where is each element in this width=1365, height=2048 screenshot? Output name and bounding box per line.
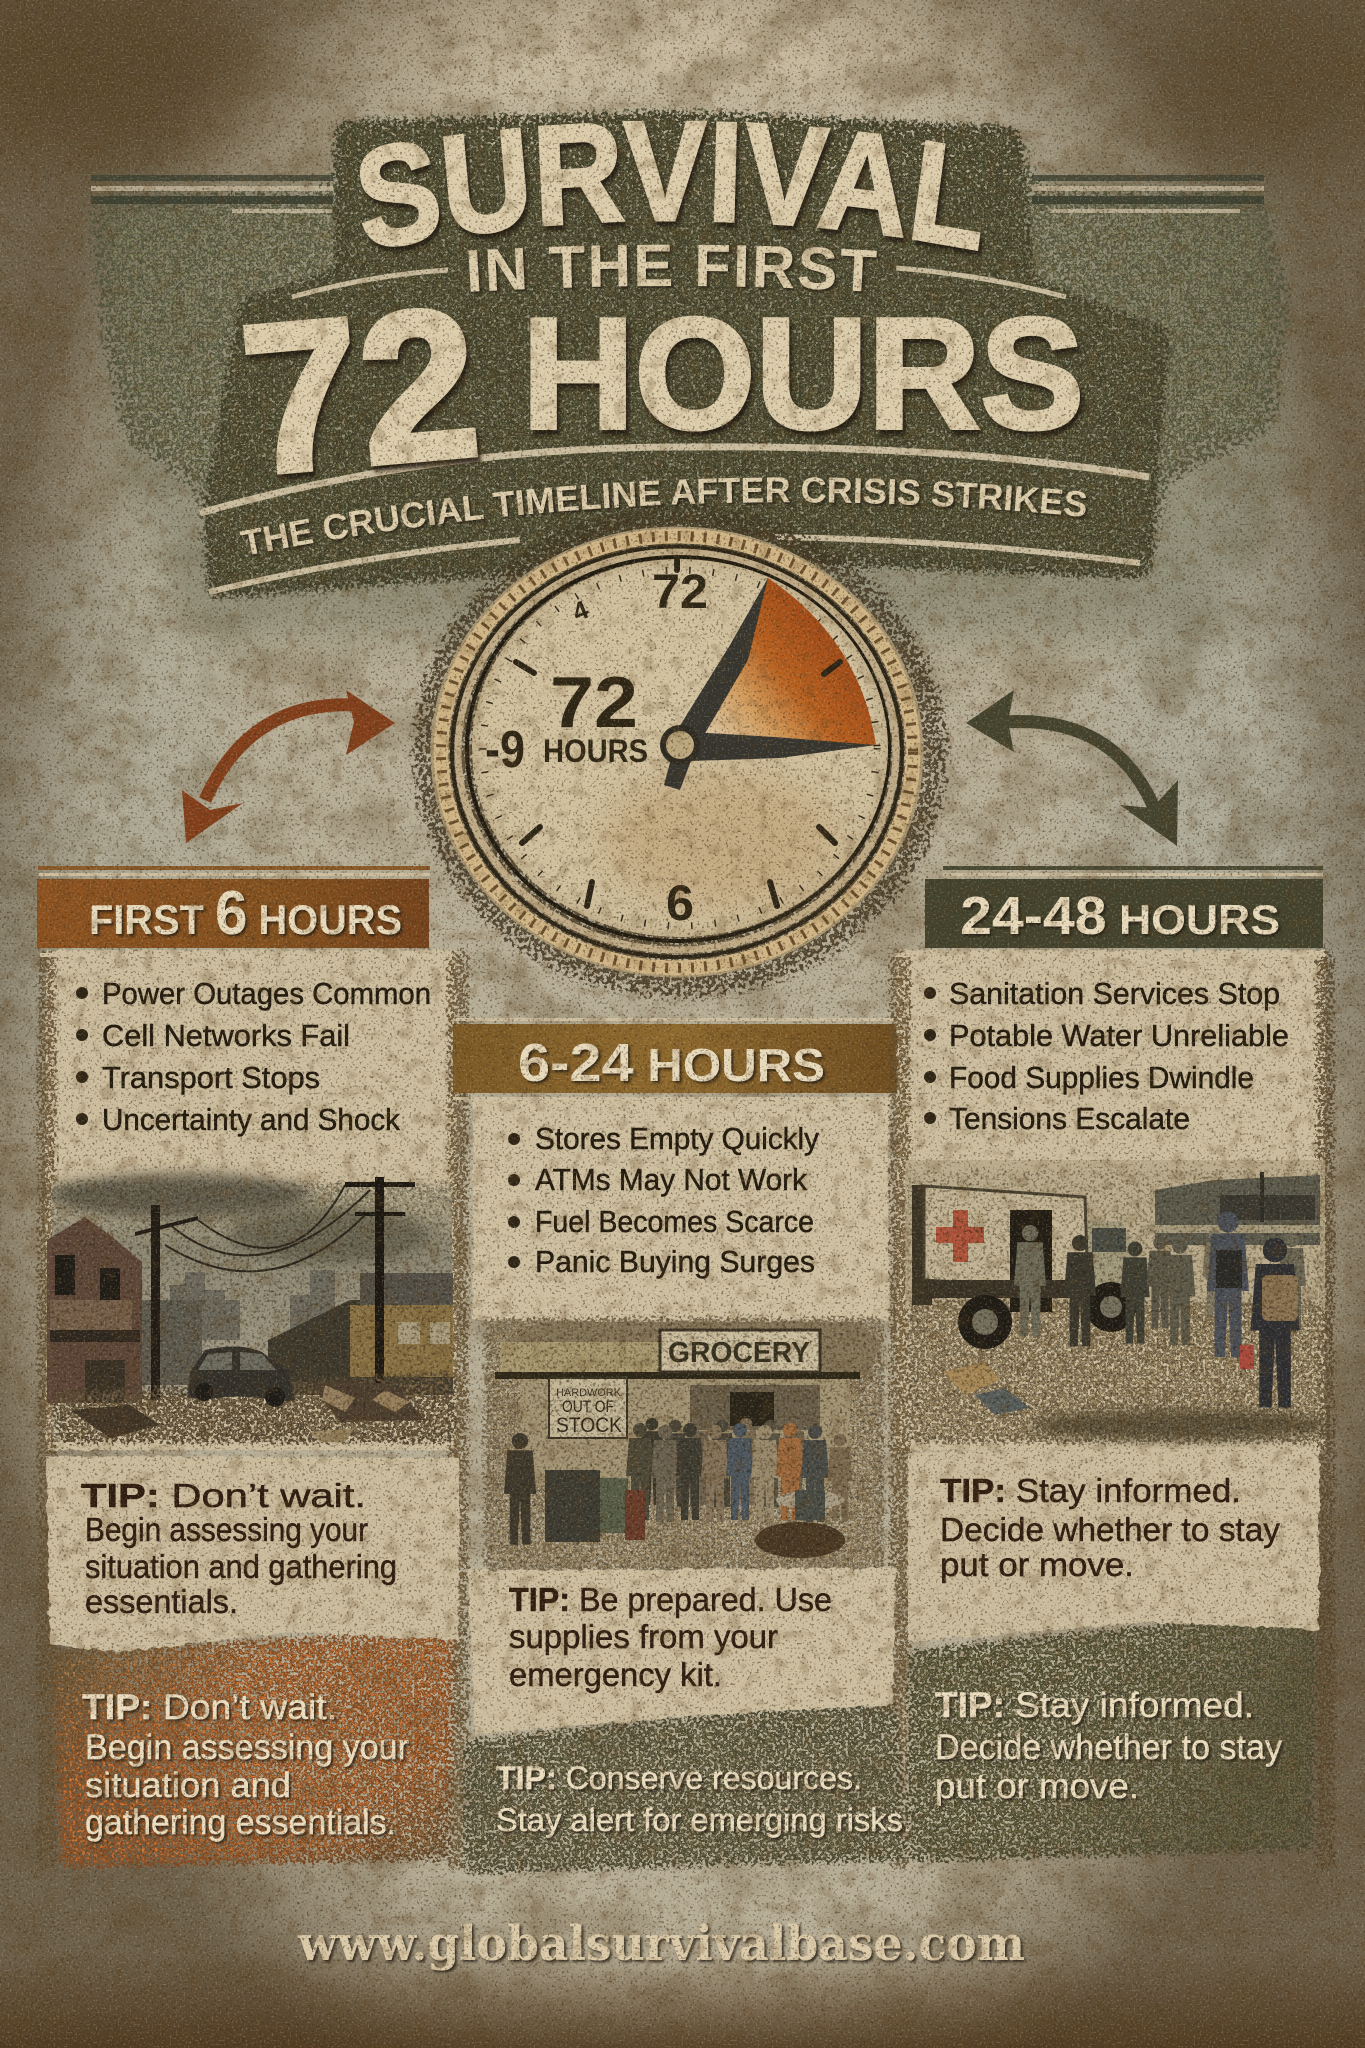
store sign — [660, 1330, 820, 1372]
tip card: stay informed (paper): Decide whether to stay — [940, 1511, 1281, 1548]
left house — [47, 1217, 142, 1403]
tip card: don't wait (paper): Begin assessing your — [85, 1511, 368, 1548]
tip card: be prepared (paper) — [468, 1568, 895, 1734]
tip card: stay informed (paper) — [908, 1448, 1319, 1642]
bullet list: Cell Networks Fail — [102, 1018, 350, 1053]
bullet list — [508, 1121, 819, 1279]
header banner: 24-48 hours: 24-48 HOURS — [960, 886, 1280, 946]
dial numerals: 6 — [666, 875, 694, 931]
bullet list — [924, 976, 1289, 1136]
red cross — [936, 1210, 984, 1262]
tip card: don't wait (paper) — [46, 1456, 460, 1652]
clock: rope-framed 72 hours dial — [414, 508, 946, 996]
tip card: stay informed (paper): put or move. — [940, 1546, 1134, 1583]
dial numerals — [485, 566, 708, 931]
tip card: stay informed (olive): Decide whether to stay — [935, 1728, 1282, 1767]
orange elapsed wedge — [692, 578, 876, 745]
tip card: don't wait (paper): essentials. — [85, 1583, 238, 1620]
header banner: first 6 hours: FIRST 6 HOURS — [89, 879, 402, 948]
tip card: be prepared (paper): emergency kit. — [509, 1656, 722, 1693]
background buildings — [1140, 1172, 1320, 1245]
title: IN THE FIRST: IN THE FIRST — [468, 244, 880, 295]
illustration: blackout street — [47, 1165, 455, 1443]
tip card: don't wait (rust): situation and — [85, 1766, 291, 1805]
panel body paper — [897, 950, 1325, 1450]
dial numerals: HOURS — [543, 733, 648, 769]
queue of people — [626, 1418, 853, 1522]
right buildings — [268, 1273, 453, 1395]
title: SURVIVAL: SURVIVAL — [360, 120, 985, 258]
illustration: aid truck and crowd — [905, 1160, 1330, 1443]
wrecked car — [188, 1346, 295, 1407]
tip card: don't wait (rust): gathering essentials. — [85, 1803, 396, 1842]
tip card: conserve resources (olive): TIP: Conserve resources. — [496, 1760, 862, 1796]
tip card: don't wait (paper): TIP: Don’t wait. — [81, 1477, 366, 1514]
tip card: be prepared (paper): supplies from your — [509, 1618, 778, 1655]
tip card: don't wait (rust): TIP: Don’t wait. — [82, 1688, 337, 1727]
tip card: don't wait (paper): situation and gathering — [85, 1548, 397, 1585]
out of stock sign: OUT OF — [562, 1397, 614, 1416]
rope frame — [432, 528, 922, 976]
panel: first 6 hours — [37, 866, 468, 1870]
debris on ground — [943, 1362, 1330, 1440]
bullet list — [76, 976, 431, 1137]
bullet list: ATMs May Not Work — [535, 1162, 807, 1197]
dial numerals: -9 — [485, 721, 525, 779]
title: 72 HOURS — [233, 262, 1084, 519]
hour ticks — [516, 560, 840, 906]
people with backpacks — [1014, 1212, 1306, 1408]
minute ticks — [483, 570, 877, 926]
out of stock sign — [549, 1378, 627, 1438]
panel: 24-48 hours — [890, 866, 1334, 1870]
tip card: stay informed (olive): put or move. — [935, 1767, 1139, 1806]
store sign: GROCERY — [668, 1337, 810, 1369]
tip card: be prepared (paper): TIP: Be prepared. Use — [509, 1581, 832, 1618]
tip card: conserve resources (olive): Stay alert for emerging risks. — [496, 1802, 912, 1838]
dial numerals: 72 — [652, 566, 708, 619]
arrow: right olive double arrow — [966, 690, 1178, 846]
bullet list: Potable Water Unreliable — [949, 1018, 1289, 1053]
bullet list: Tensions Escalate — [949, 1101, 1190, 1136]
tip card: don't wait (rust) — [50, 1630, 455, 1868]
dial numerals: 72 — [550, 663, 638, 743]
tip card: stay informed (paper): TIP: Stay informed. — [940, 1472, 1241, 1509]
title: 72 HOURS: HOURS — [522, 286, 1084, 462]
header banner: first 6 hours — [37, 866, 452, 957]
utility poles and wires — [135, 1177, 415, 1400]
out of stock sign: HARDWORK — [556, 1387, 622, 1399]
header banner: 24-48 hours — [895, 866, 1325, 957]
aid truck — [912, 1185, 1136, 1349]
panel: 6-24 hours — [453, 1018, 901, 1573]
street rubble — [50, 1372, 455, 1443]
panel body paper — [46, 950, 456, 1450]
bullet list: Transport Stops — [102, 1060, 320, 1095]
bullet list: Sanitation Services Stop — [949, 976, 1280, 1011]
website url: www.globalsurvivalbase.com — [297, 1916, 1025, 1972]
centre pivot — [660, 725, 700, 765]
dial face — [472, 559, 888, 937]
clock hands — [664, 578, 876, 790]
panel body paper — [473, 1100, 889, 1320]
man with crates — [504, 1433, 645, 1544]
tip card: don't wait (rust): Begin assessing your — [85, 1728, 409, 1767]
tip card: stay informed (olive) — [908, 1610, 1315, 1862]
arrow: left rust double arrow — [182, 690, 395, 843]
header banner: 6-24 hours — [453, 1018, 901, 1100]
bullet list: Stores Empty Quickly — [535, 1121, 819, 1156]
bullet list: Panic Buying Surges — [535, 1244, 815, 1279]
title: 72 HOURS: 72 — [233, 262, 487, 519]
dial numerals: 4 — [568, 594, 593, 627]
out of stock sign: STOCK — [556, 1414, 622, 1437]
tip card: stay informed (olive): TIP: Stay informed. — [935, 1686, 1254, 1725]
bullet list: Uncertainty and Shock — [102, 1102, 400, 1137]
header banner: 6-24 hours: 6-24 HOURS — [518, 1033, 825, 1093]
bullet list: Power Outages Common — [102, 976, 431, 1011]
title banner plate — [91, 112, 1288, 598]
bullet list: Food Supplies Dwindle — [949, 1060, 1254, 1095]
illustration: grocery store queue — [484, 1318, 884, 1573]
subtitle: the crucial timeline: THE CRUCIAL TIMELINE AFTER CRISIS STRIKES — [240, 477, 1090, 558]
bullet list: Fuel Becomes Scarce — [535, 1204, 814, 1239]
tip card: conserve resources (olive) — [464, 1700, 912, 1874]
